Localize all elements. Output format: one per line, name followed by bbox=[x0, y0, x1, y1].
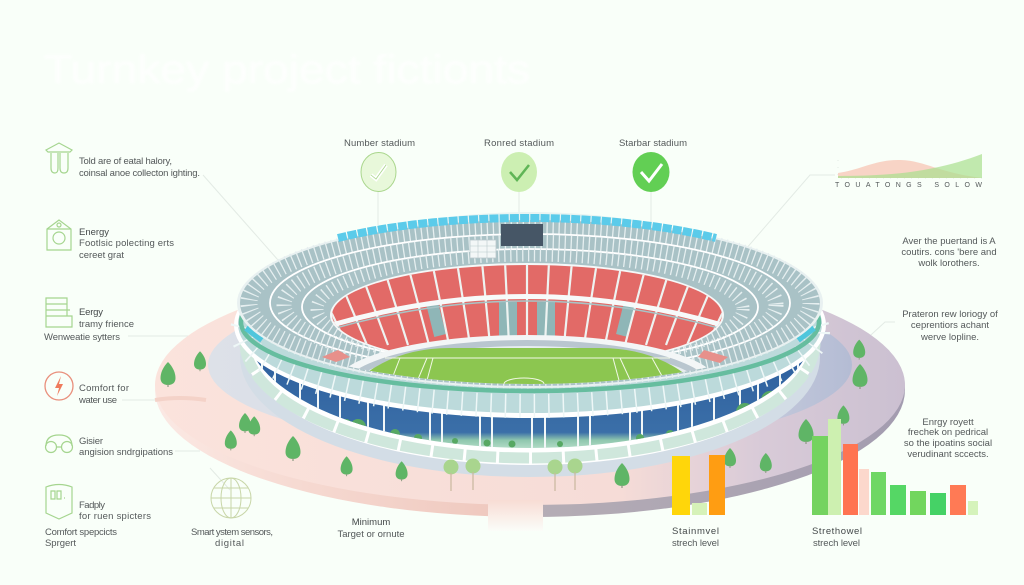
icon: globe bbox=[211, 478, 251, 518]
text block: right one: coutirs. cons 'bere and bbox=[901, 247, 997, 258]
status: starbar stadium: Starbar stadium bbox=[619, 138, 687, 149]
text block: right three: Enrgy royett bbox=[922, 417, 974, 428]
bar chart: strethowel: strech level bbox=[813, 538, 860, 549]
minimum label bbox=[337, 517, 405, 540]
feature: lighting: Told are of eatal halory, bbox=[79, 156, 172, 167]
text block: right one bbox=[901, 236, 997, 269]
feature: water: water use bbox=[78, 395, 117, 406]
status: starbar stadium bbox=[619, 138, 687, 192]
side seats bbox=[322, 350, 728, 363]
text block: right two: werve lopline. bbox=[920, 332, 979, 343]
icon: glasses bbox=[46, 435, 72, 452]
feature: smart systems bbox=[191, 478, 273, 549]
text block: right two bbox=[902, 309, 998, 343]
feature: energy one: cereet grat bbox=[79, 250, 124, 261]
status: number stadium: Number stadium bbox=[344, 138, 415, 149]
stadium base bbox=[240, 237, 820, 477]
icon: lightning bbox=[45, 372, 73, 400]
stadium bbox=[234, 212, 826, 477]
icon: stacked layers bbox=[46, 298, 72, 327]
platform: circular plaza bbox=[155, 263, 905, 531]
area chart bbox=[835, 154, 982, 189]
feature: energy one: Energy bbox=[79, 227, 109, 238]
feature: energy two bbox=[44, 298, 134, 343]
pitch and running track bbox=[349, 335, 706, 384]
blue roof band bbox=[338, 218, 716, 238]
feature: comfort: Comfort spepcicts bbox=[45, 527, 117, 538]
bar chart: stainmvel: Stainmvel bbox=[672, 526, 719, 537]
scoreboard bbox=[470, 224, 543, 258]
bar chart: stainmvel bbox=[672, 455, 725, 549]
title: Turnkey project fictionts bbox=[44, 48, 530, 92]
feature: energy one bbox=[47, 220, 174, 261]
text block: right three bbox=[904, 417, 992, 460]
feature: lighting: coinsal anoe collecton ighting. bbox=[79, 168, 200, 179]
bar chart: strethowel bbox=[812, 419, 978, 549]
perimeter railing bbox=[243, 225, 817, 465]
icon: meter bbox=[47, 220, 71, 250]
feature: angision: angision sndrgipations bbox=[79, 447, 173, 458]
icon: pillar bbox=[46, 143, 72, 173]
text block: right two: ceprentiors achant bbox=[911, 320, 989, 331]
text block: right two: Prateron rew loriogy of bbox=[902, 309, 998, 320]
feature: energy one: Footlsic polecting erts bbox=[79, 238, 174, 249]
minimum label: Minimum bbox=[352, 517, 390, 528]
bar chart: strethowel: Strethowel bbox=[812, 526, 862, 537]
status: bonred stadium: Ronred stadium bbox=[484, 138, 554, 149]
feature: comfort bbox=[45, 484, 151, 549]
text block: right three: frechek on pedrical bbox=[908, 427, 988, 438]
status: bonred stadium bbox=[484, 138, 554, 192]
trees bbox=[160, 340, 868, 491]
feature: smart systems: digital bbox=[215, 538, 244, 549]
text block: right one: wolk lorothers. bbox=[917, 258, 980, 269]
seating bowl bbox=[330, 263, 724, 351]
outer eave ring bbox=[234, 232, 826, 418]
feature: water bbox=[45, 372, 129, 406]
feature: lighting bbox=[46, 143, 200, 179]
upper roof slats bbox=[237, 218, 823, 388]
feature: energy two: Eergy bbox=[79, 307, 103, 318]
status: number stadium bbox=[344, 138, 415, 192]
feature: energy two: Wenweatie sytters bbox=[44, 332, 120, 343]
feature: comfort: Sprgert bbox=[45, 538, 76, 549]
text block: right one: Aver the puertand is A bbox=[902, 236, 996, 247]
bar chart: stainmvel: strech level bbox=[672, 538, 719, 549]
minimum label: Target or ornute bbox=[337, 529, 405, 540]
feature: water: Comfort for bbox=[79, 383, 129, 394]
feature: smart systems: Smart ystem sensors, bbox=[191, 527, 273, 538]
feature: comfort: for ruen spicters bbox=[79, 511, 151, 522]
feature: angision: Gisier bbox=[79, 436, 103, 447]
icon: shield bbox=[46, 484, 72, 519]
feature: angision bbox=[46, 435, 173, 458]
connector lines bbox=[122, 175, 895, 490]
feature: comfort: Fadply bbox=[79, 500, 105, 511]
glazed facade bbox=[240, 212, 820, 450]
text block: right three: so the ipoatins social bbox=[904, 438, 992, 449]
area chart: TOUATONGS SOLOW bbox=[835, 182, 982, 189]
pitch bbox=[370, 348, 682, 384]
text block: right three: verudinant sccects. bbox=[907, 449, 989, 460]
feature: energy two: tramy frience bbox=[79, 319, 134, 330]
